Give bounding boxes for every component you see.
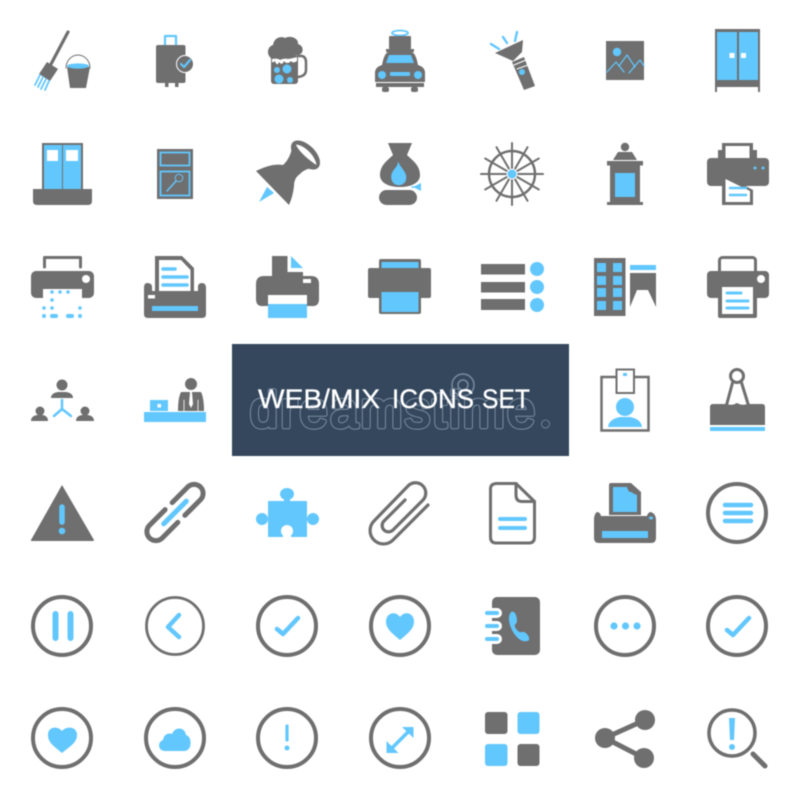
icon: heart circle (371, 597, 429, 655)
icon: cloud circle (146, 709, 204, 767)
watermark: dreamstime (250, 382, 535, 438)
icon: check circle (708, 597, 766, 655)
icon: list with dots (481, 262, 544, 312)
banner: web mix icons set (232, 344, 569, 456)
icon: paper clip (370, 483, 428, 544)
icon: expand arrows circle (371, 709, 429, 767)
icon: exclamation circle (258, 709, 316, 767)
icon: printer with blue page (594, 483, 656, 543)
icon: push pin (256, 135, 325, 205)
icon: four squares grid (485, 712, 540, 766)
icon: oil lamp (379, 143, 421, 205)
icon: id badge (602, 370, 648, 430)
icon: printer with report page (707, 258, 769, 318)
icon: heart circle (33, 709, 91, 767)
icon: flashlight (491, 32, 535, 90)
icon: key panel (157, 149, 193, 199)
banner title: ICONS (392, 384, 474, 414)
icon: podium speaker (607, 143, 643, 205)
icon: picture (606, 41, 644, 80)
icon: more dots circle (596, 597, 654, 655)
icon: check circle (258, 597, 316, 655)
banner title: WEB/MIX (258, 384, 380, 414)
icon: ship wheel (481, 143, 543, 205)
icon: broom and bucket (35, 32, 90, 90)
icon: suitcase with check (156, 36, 194, 87)
icon: menu circle (708, 484, 766, 542)
icon: document (490, 484, 534, 543)
icon: back chevron circle (146, 598, 204, 654)
banner title (258, 384, 530, 414)
icon: beer mug (268, 37, 306, 84)
icon: car with luggage (375, 30, 425, 92)
icon: office building (594, 258, 656, 316)
icon: binder clip (710, 370, 765, 431)
icon: wardrobe (715, 29, 760, 92)
watermark: dreamstime (250, 382, 535, 438)
banner title: SET (482, 384, 530, 414)
icon: share (595, 710, 655, 768)
icon: printer with document (144, 256, 206, 318)
icon: warning triangle (31, 485, 94, 541)
icon: printer with dotted output (31, 258, 94, 318)
icon: pause circle (33, 597, 91, 655)
icon: reception desk with man (144, 378, 206, 422)
icon: double doors on base (33, 143, 92, 205)
icon: chain link (143, 481, 207, 544)
icon: printer with angled page (707, 143, 769, 205)
icon: phone book (483, 597, 540, 655)
icon: team hierarchy (31, 380, 94, 421)
icon: printer with blue output (256, 256, 319, 318)
icon: search with exclamation (709, 710, 765, 766)
icon: puzzle piece (256, 488, 319, 538)
icon: front printer (368, 259, 431, 314)
